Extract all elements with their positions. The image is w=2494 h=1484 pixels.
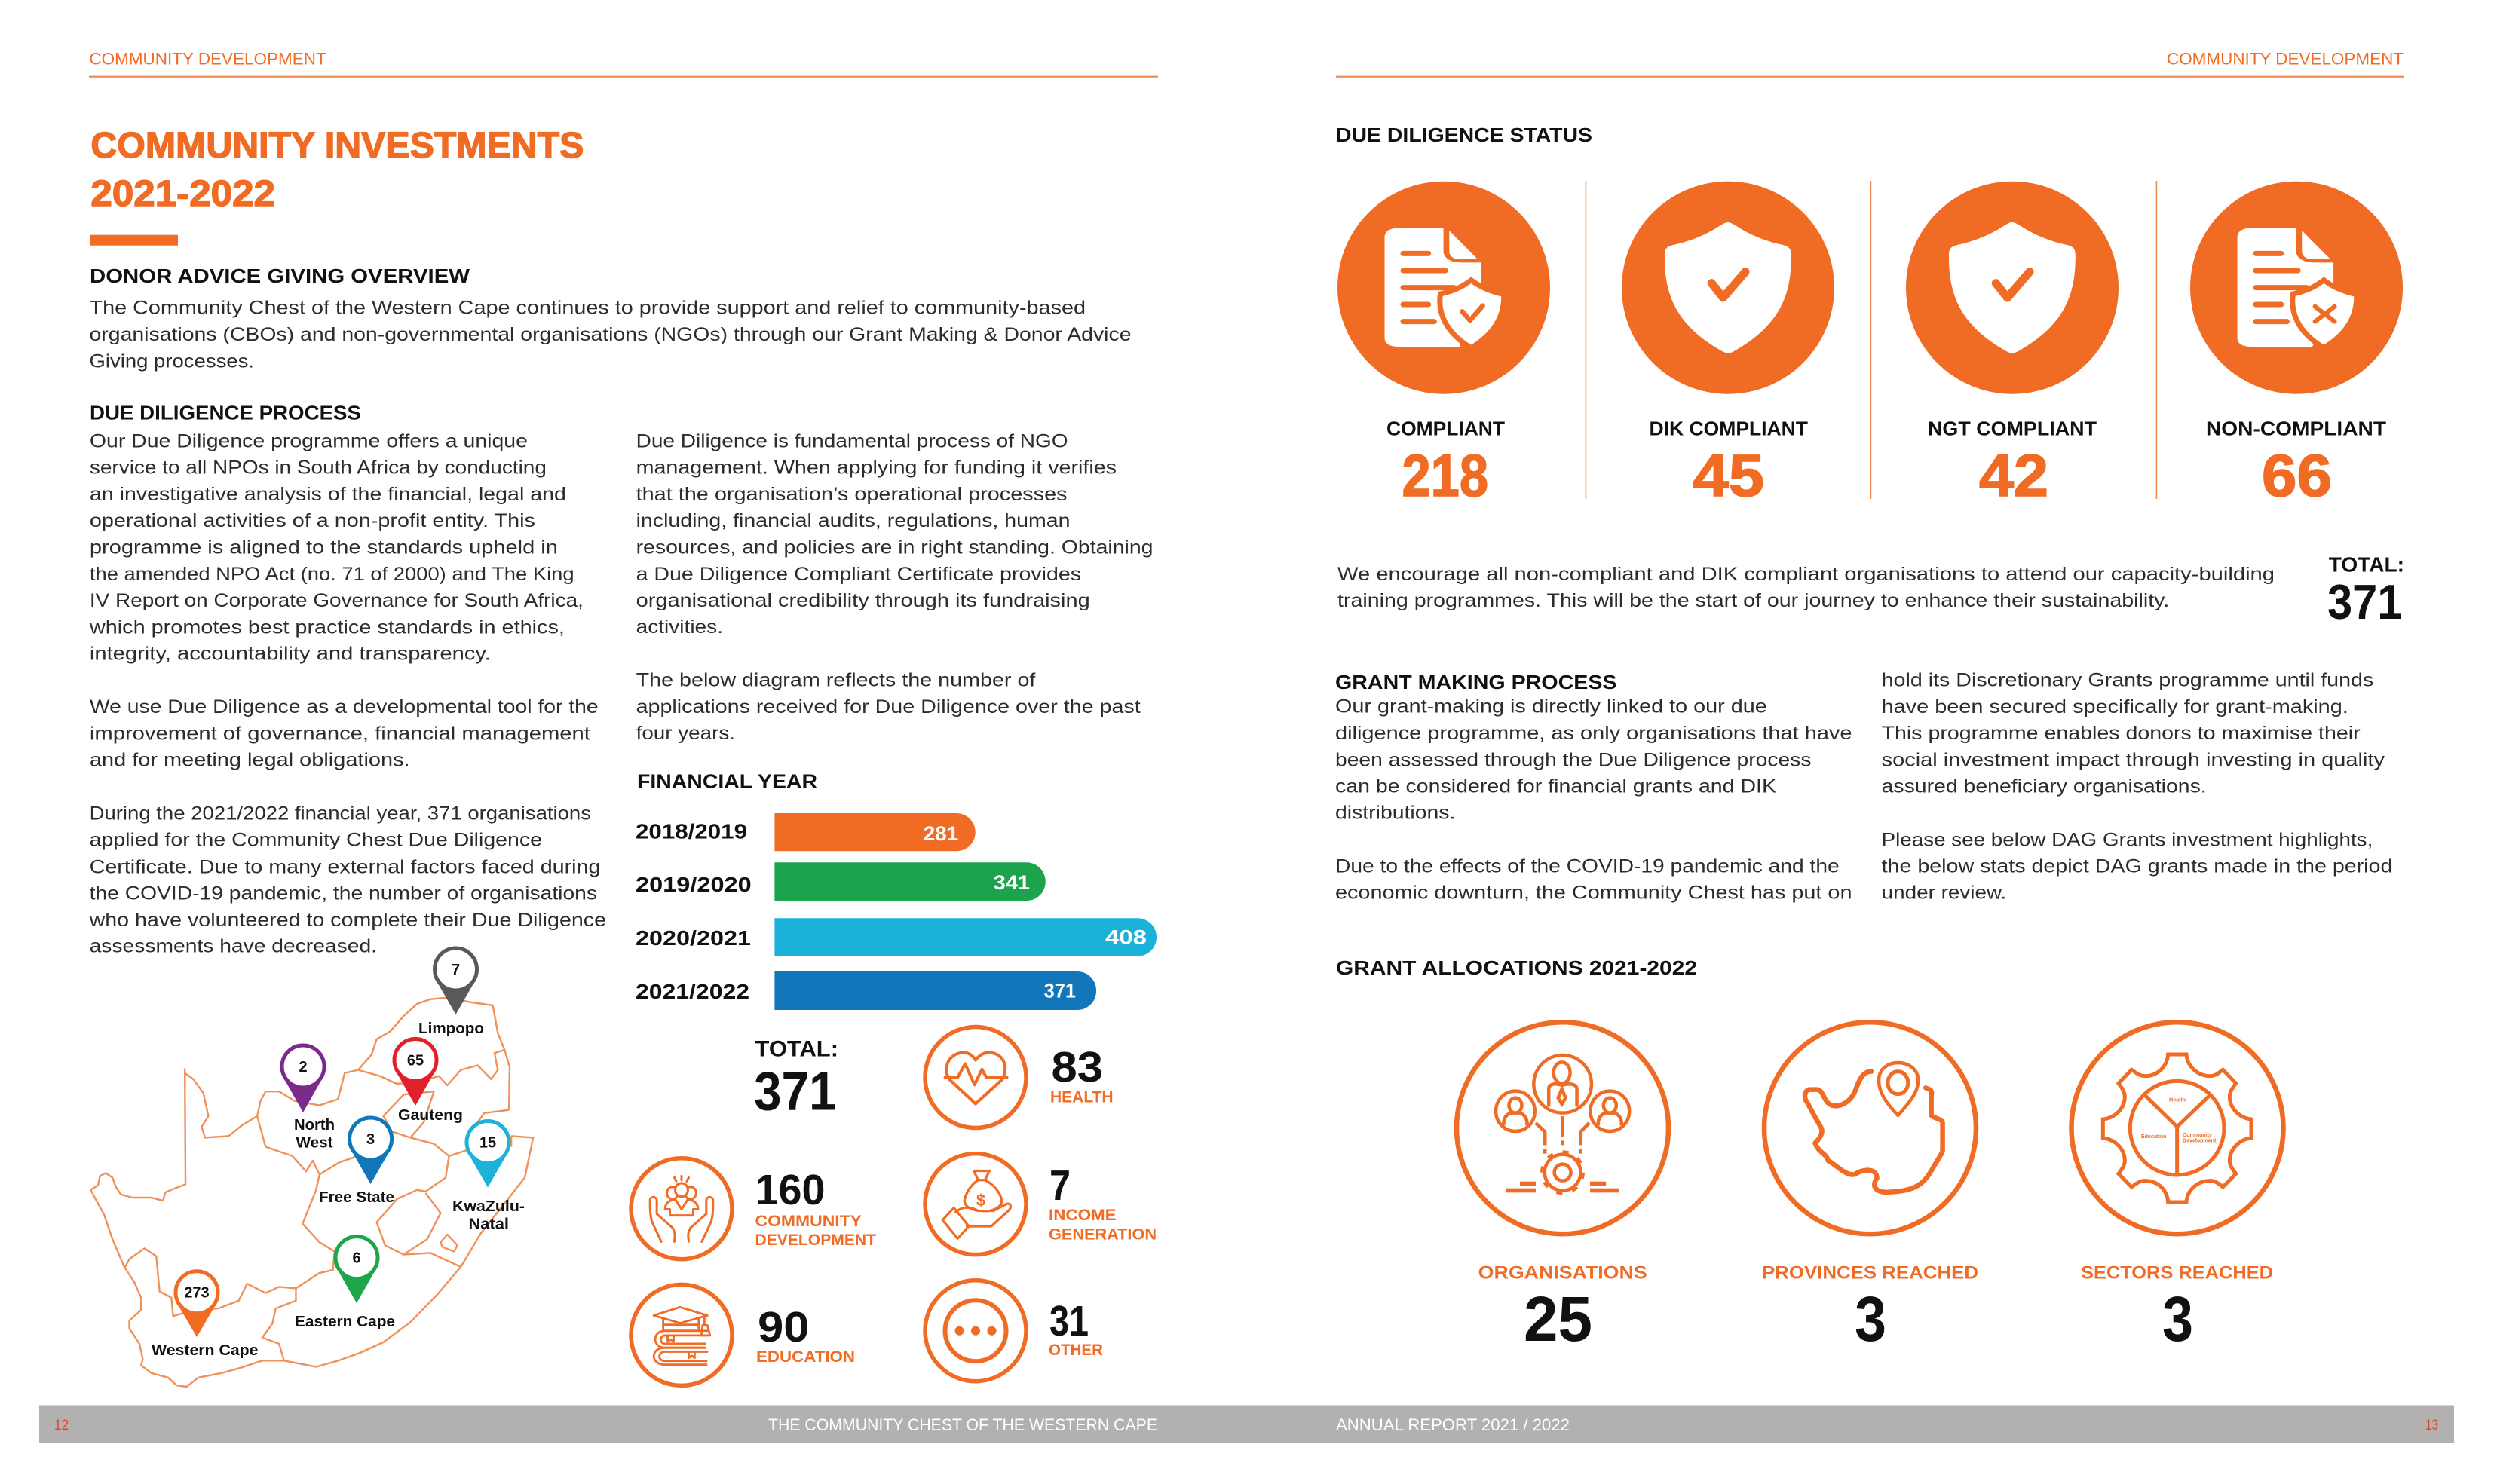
- sector stat: health: [925, 1027, 1114, 1128]
- status: NGT compliant: [1906, 182, 2119, 509]
- text block: capacity building note: [1337, 564, 2275, 611]
- sector stat: community development: COMMUNITY: [755, 1213, 862, 1230]
- pin: Western Cape: [176, 1271, 218, 1337]
- grant stat: sectors reached: 3: [2162, 1284, 2193, 1354]
- bar 2019/2020: 341: [994, 871, 1030, 894]
- bar 2021/2022: 371: [1044, 980, 1076, 1002]
- pin: Gauteng: 65: [407, 1052, 424, 1069]
- bar 2018/2019: 281: [924, 822, 958, 845]
- pin: Limpopo: 7: [452, 962, 460, 978]
- sector stat: income generation: INCOME: [1049, 1207, 1117, 1224]
- text block: grant making right column: [1882, 670, 2392, 904]
- text block: due diligence right column: a Due Diligence Compliant Certificate provides: [636, 564, 1081, 585]
- pin: Western Cape: 273: [184, 1285, 210, 1302]
- pin: Gauteng: [394, 1039, 437, 1106]
- grant stat: organisations: ORGANISATIONS: [1478, 1263, 1647, 1284]
- text block: due diligence left column: operational activities of a non-profit entity. This: [90, 510, 535, 531]
- sector stat: community development: 160: [755, 1166, 825, 1214]
- heading: grant making process: GRANT MAKING PROCESS: [1335, 671, 1616, 693]
- icon: gear with three sectors: Development: [2183, 1139, 2217, 1144]
- sector stat: other: [925, 1281, 1103, 1381]
- icon: shield check: [1906, 182, 2119, 394]
- grant stat: provinces reached: PROVINCES REACHED: [1762, 1263, 1978, 1284]
- right page header: COMMUNITY DEVELOPMENT: [2167, 50, 2404, 69]
- province labels: Eastern Cape: [295, 1314, 395, 1330]
- total status count: 371: [2327, 574, 2402, 629]
- sector stat: income generation: GENERATION: [1049, 1225, 1157, 1244]
- sector stat: health: HEALTH: [1050, 1088, 1114, 1106]
- status: compliant: 218: [1402, 442, 1488, 509]
- title: 2021-2022: [90, 174, 275, 214]
- total status count: [2327, 552, 2404, 629]
- icon: gear with three sectors: Community: [2183, 1133, 2212, 1138]
- status: non-compliant: [2190, 182, 2403, 509]
- heading: due diligence status: DUE DILIGENCE STATUS: [1336, 124, 1592, 146]
- title: [90, 126, 584, 214]
- bar 2021/2022: 2021/2022: [636, 980, 749, 1003]
- text block: grant making left column: Due to the effects of the COVID-19 pandemic and the: [1335, 856, 1840, 877]
- text block: grant making right column: This programme enables donors to maximise their: [1882, 723, 2361, 744]
- text block: due diligence right column: activities.: [636, 617, 723, 638]
- footer bar: 12: [54, 1418, 69, 1434]
- grant stat: sectors reached: SECTORS REACHED: [2081, 1263, 2273, 1284]
- province labels: Gauteng: [398, 1107, 463, 1124]
- map outline: [90, 998, 533, 1387]
- status: non-compliant: NON-COMPLIANT: [2206, 418, 2386, 440]
- text block: due diligence left column: integrity, accountability and transparency.: [90, 644, 491, 665]
- text block: due diligence left column: [88, 430, 606, 956]
- pin: Free State: 3: [366, 1131, 375, 1148]
- sector stat: other: OTHER: [1049, 1342, 1103, 1359]
- text block: grant making left column: Our grant-making is directly linked to our due: [1335, 696, 1767, 718]
- pin: Eastern Cape: 6: [352, 1250, 361, 1267]
- bar 2018/2019: 2018/2019: [636, 820, 747, 843]
- title accent bar: [90, 235, 178, 246]
- sector stat: community development: DEVELOPMENT: [755, 1232, 876, 1249]
- total applications: [754, 1037, 838, 1122]
- sector stat: income generation: [925, 1154, 1157, 1255]
- total applications: TOTAL:: [755, 1037, 838, 1062]
- grant stat: sectors reached: [2072, 1022, 2283, 1354]
- bar 2020/2021: 408: [1105, 926, 1147, 949]
- heading: due diligence process: DUE DILIGENCE PROCESS: [90, 402, 361, 424]
- text block: due diligence right column: Due Diligence is fundamental process of NGO: [636, 430, 1068, 451]
- text block: due diligence left column: which promotes best practice standards in ethics,: [89, 617, 565, 638]
- heading: grant allocations: GRANT ALLOCATIONS 2021-2022: [1336, 956, 1697, 979]
- text block: grant making left column: distributions.: [1335, 803, 1455, 824]
- icon: document with shield check: [1337, 182, 1550, 394]
- grant stat: provinces reached: [1762, 1022, 1978, 1354]
- pin: North West: [282, 1045, 324, 1112]
- left page header: COMMUNITY DEVELOPMENT: [89, 50, 326, 69]
- text block: grant making left column: diligence programme, as only organisations that have: [1335, 723, 1852, 744]
- bar 2019/2020: [636, 862, 1046, 901]
- total applications: 371: [754, 1062, 837, 1122]
- text block: grant making right column: hold its Discretionary Grants programme until funds: [1882, 670, 2373, 691]
- province labels: KwaZulu-: [452, 1198, 525, 1215]
- text block: due diligence left column: improvement of governance, financial management: [90, 723, 590, 744]
- text block: donor advice intro: Giving processes.: [89, 351, 254, 372]
- heading: donor advice giving overview: DONOR ADVICE GIVING OVERVIEW: [90, 265, 470, 287]
- icon: gear with three sectors: [2072, 1022, 2283, 1234]
- footer bar: [39, 1405, 2454, 1443]
- text block: due diligence left column: Our Due Diligence programme offers a unique: [90, 430, 528, 451]
- text block: due diligence right column: including, financial audits, regulations, human: [636, 510, 1071, 531]
- map: provinces of South Africa: [90, 948, 533, 1387]
- text block: due diligence right column: that the organisation’s operational processes: [636, 484, 1068, 505]
- icon: shield check: [1622, 182, 1834, 394]
- footer bar: 13: [2425, 1418, 2438, 1434]
- icon: gear with three sectors: Education: [2141, 1134, 2166, 1140]
- text block: grant making right column: under review.: [1882, 883, 2006, 904]
- text block: due diligence left column: applied for the Community Chest Due Diligence: [90, 830, 542, 851]
- bar 2020/2021: [636, 918, 1157, 956]
- text block: grant making left column: economic downturn, the Community Chest has put on: [1335, 883, 1852, 904]
- icon: money bag in hand: $: [976, 1191, 985, 1210]
- text block: capacity building note: training programmes. This will be the start of our journey to enhance their sustainability.: [1337, 590, 2169, 611]
- text block: capacity building note: We encourage all non-compliant and DIK compliant organisations to attend our capacity-building: [1337, 564, 2275, 585]
- status: non-compliant: 66: [2262, 442, 2332, 509]
- text block: grant making left column: been assessed through the Due Diligence process: [1335, 750, 1811, 771]
- status: DIK compliant: [1622, 182, 1834, 509]
- text block: due diligence left column: We use Due Diligence as a developmental tool for the: [90, 696, 599, 718]
- footer bar: ANNUAL REPORT 2021 / 2022: [1336, 1415, 1570, 1434]
- text block: grant making left column: [1335, 696, 1852, 904]
- pin: KwaZulu-Natal: [467, 1121, 509, 1188]
- province labels: [152, 1020, 525, 1359]
- text block: due diligence right column: organisational credibility through its fundraising: [636, 590, 1090, 611]
- text block: due diligence left column: Certificate. Due to many external factors faced during: [90, 856, 601, 877]
- footer bar: THE COMMUNITY CHEST OF THE WESTERN CAPE: [768, 1415, 1157, 1434]
- bar 2018/2019: [636, 813, 976, 851]
- text block: donor advice intro: [89, 298, 1132, 372]
- sector stat: community development: [631, 1158, 876, 1259]
- text block: grant making right column: the below stats depict DAG grants made in the period: [1882, 856, 2392, 877]
- text block: donor advice intro: The Community Chest of the Western Cape continues to provide support and relief to community-based: [89, 298, 1086, 319]
- text block: grant making right column: Please see below DAG Grants investment highlights,: [1882, 829, 2373, 850]
- province labels: Free State: [319, 1189, 394, 1206]
- province labels: Western Cape: [152, 1342, 258, 1359]
- status: compliant: [1337, 182, 1550, 509]
- status: compliant: COMPLIANT: [1386, 418, 1505, 440]
- bar 2020/2021: 2020/2021: [636, 926, 751, 950]
- pin: KwaZulu-Natal: 15: [479, 1135, 496, 1152]
- icon: heart with pulse: [925, 1027, 1026, 1128]
- icon: document with shield cross: [2190, 182, 2403, 394]
- province labels: West: [296, 1135, 333, 1152]
- status: DIK compliant: 45: [1693, 442, 1764, 509]
- status: NGT compliant: 42: [1979, 442, 2048, 509]
- icon: South Africa map with pin: [1764, 1022, 1976, 1234]
- text block: due diligence left column: assessments have decreased.: [90, 935, 377, 956]
- grant stat: provinces reached: 3: [1855, 1284, 1886, 1354]
- sector stat: health: 83: [1051, 1043, 1103, 1091]
- text block: due diligence right column: four years.: [636, 723, 735, 744]
- icon: three dots in ring: [925, 1281, 1026, 1381]
- text block: due diligence right column: [636, 430, 1154, 744]
- pin: Limpopo: [434, 948, 476, 1014]
- bar 2019/2020: 2019/2020: [636, 873, 752, 896]
- bar 2021/2022: [636, 971, 1096, 1010]
- sector stat: education: 90: [758, 1303, 810, 1351]
- text block: due diligence left column: programme is aligned to the standards upheld in: [90, 537, 558, 558]
- icon: money bag in hand: [925, 1154, 1026, 1255]
- sector stat: income generation: 7: [1049, 1161, 1071, 1210]
- text block: due diligence right column: resources, and policies are in right standing. Obtaining: [636, 537, 1154, 558]
- pin: North West: 2: [299, 1059, 308, 1076]
- text block: due diligence left column: the COVID-19 pandemic, the number of organisations: [90, 883, 597, 904]
- grant stat: organisations: [1457, 1022, 1668, 1354]
- sector stat: education: [631, 1284, 855, 1385]
- pin: Free State: [350, 1118, 392, 1184]
- pin: Eastern Cape: [335, 1237, 378, 1303]
- province labels: North: [294, 1117, 335, 1134]
- icon: graduation cap and books: [631, 1284, 732, 1385]
- text block: due diligence left column: who have volunteered to complete their Due Diligence: [88, 910, 606, 931]
- sector stat: education: EDUCATION: [756, 1348, 855, 1366]
- text block: grant making left column: can be considered for financial grants and DIK: [1335, 776, 1776, 797]
- text block: grant making right column: social investment impact through investing in quality: [1882, 750, 2385, 771]
- text block: grant making right column: have been secured specifically for grant-making.: [1882, 696, 2348, 718]
- text block: due diligence right column: applications received for Due Diligence over the past: [636, 696, 1141, 718]
- icon: hands holding people: [631, 1158, 732, 1259]
- text block: due diligence left column: the amended NPO Act (no. 71 of 2000) and The King: [90, 564, 574, 585]
- text block: due diligence right column: The below diagram reflects the number of: [636, 670, 1035, 691]
- text block: grant making right column: assured beneficiary organisations.: [1882, 776, 2207, 797]
- sector stat: other: 31: [1049, 1297, 1089, 1345]
- text block: due diligence left column: an investigative analysis of the financial, legal and: [90, 484, 566, 505]
- text block: due diligence left column: IV Report on Corporate Governance for South Africa,: [90, 590, 584, 611]
- icon: people linked to gear: [1457, 1022, 1668, 1234]
- province labels: Limpopo: [418, 1020, 484, 1037]
- text block: due diligence left column: and for meeting legal obligations.: [90, 750, 410, 771]
- status: DIK compliant: DIK COMPLIANT: [1650, 418, 1808, 440]
- title: COMMUNITY INVESTMENTS: [90, 126, 584, 166]
- bar chart: financial year: [636, 770, 1157, 1010]
- province labels: Natal: [469, 1216, 509, 1233]
- chart heading: FINANCIAL YEAR: [637, 770, 817, 793]
- total status count: TOTAL:: [2329, 552, 2404, 576]
- grant stat: organisations: 25: [1524, 1284, 1592, 1354]
- text block: donor advice intro: organisations (CBOs) and non-governmental organisations (NGOs) through our Grant Making & Donor Advice: [89, 324, 1132, 345]
- text block: due diligence left column: During the 2021/2022 financial year, 371 organisations: [90, 803, 591, 824]
- icon: gear with three sectors: Health: [2169, 1098, 2186, 1103]
- text block: due diligence left column: service to all NPOs in South Africa by conducting: [90, 457, 547, 479]
- text block: due diligence right column: management. When applying for funding it verifies: [636, 457, 1117, 478]
- status: NGT compliant: NGT COMPLIANT: [1928, 418, 2097, 440]
